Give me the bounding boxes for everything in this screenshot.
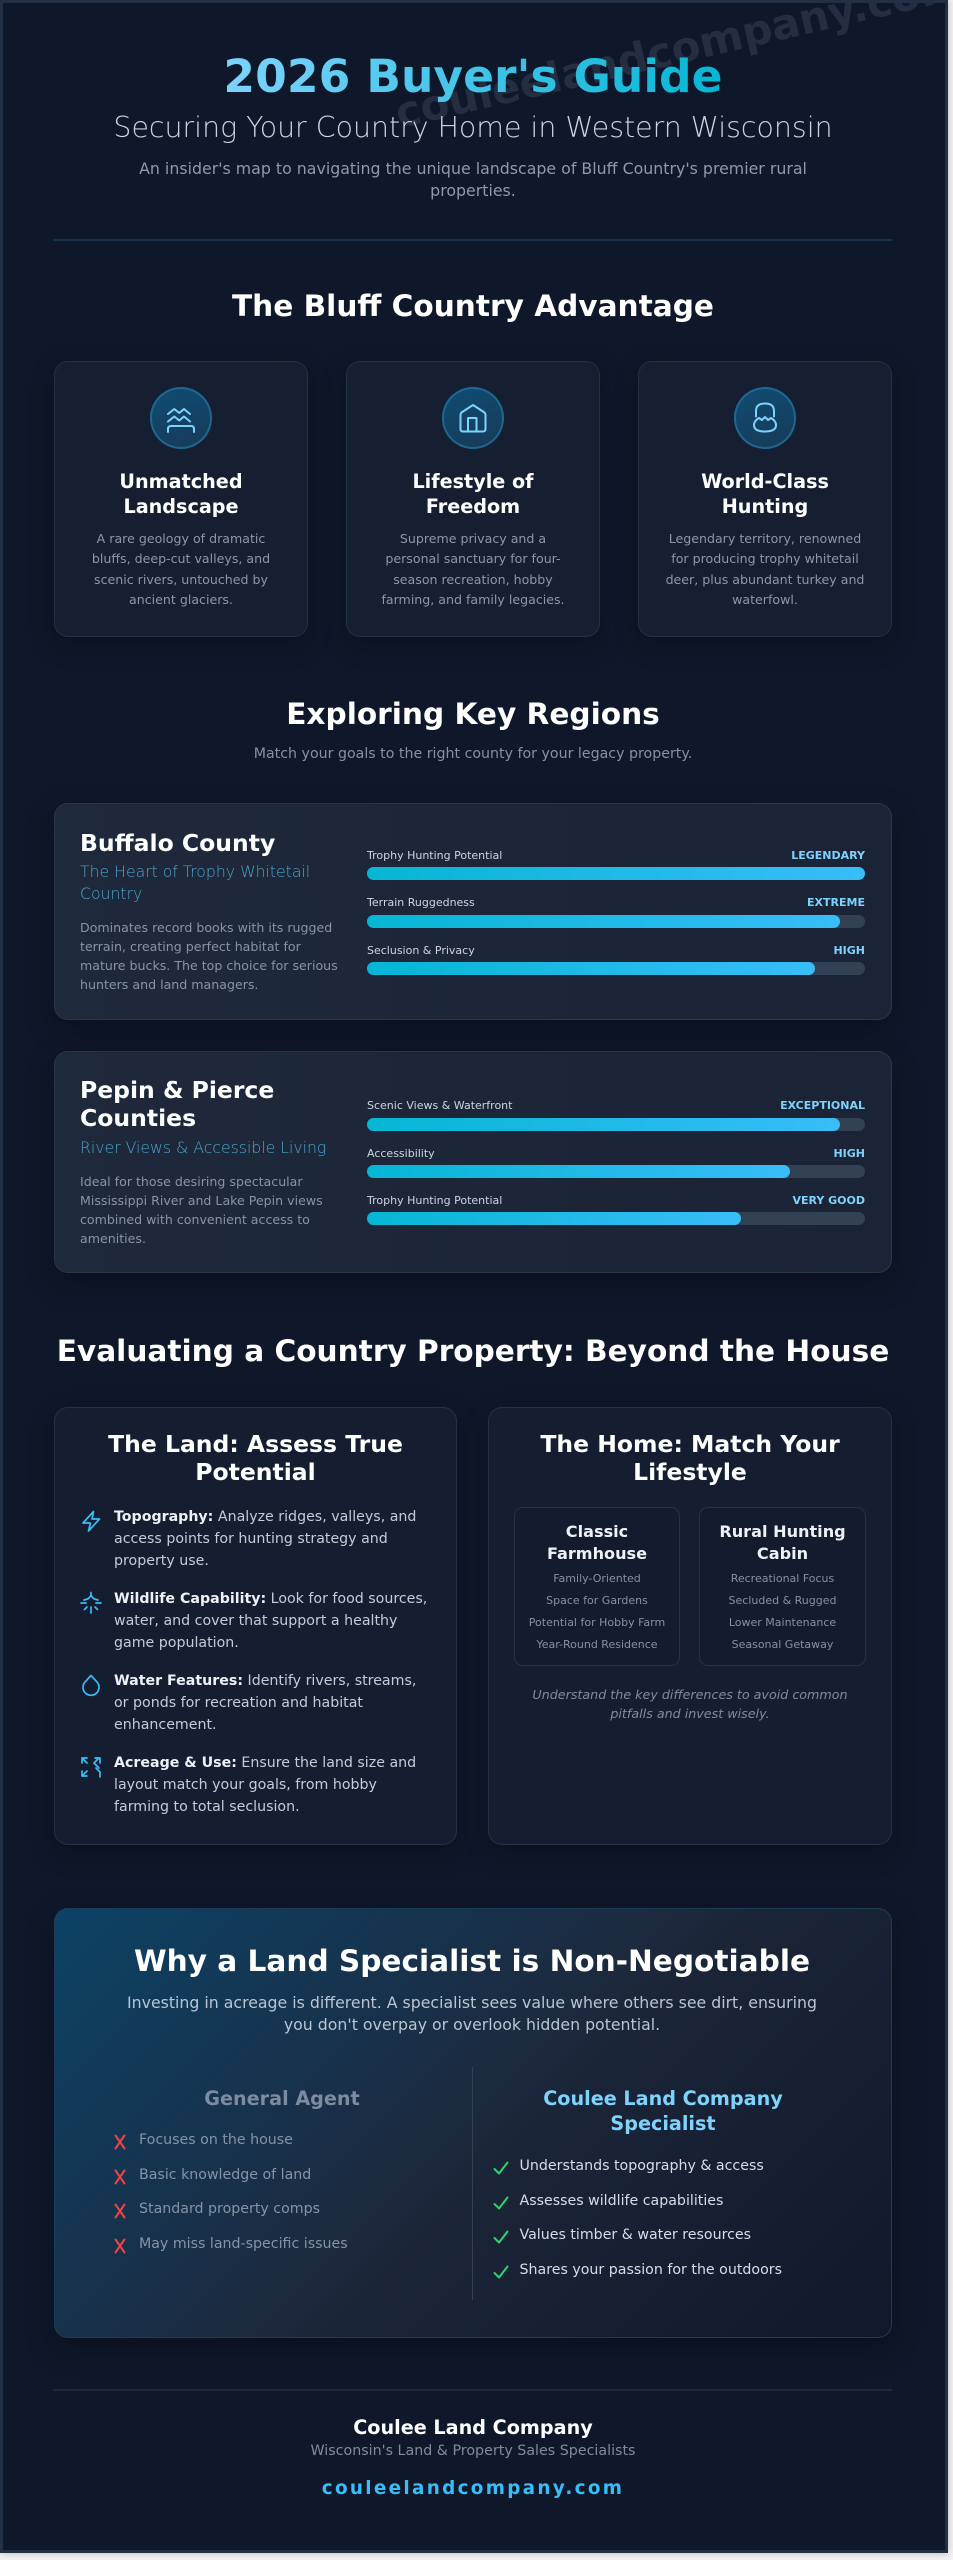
farmhouse traits: Family-Oriented: [553, 1572, 641, 1585]
card text: Supreme privacy and a: [400, 531, 546, 546]
icon: acreage: [81, 1757, 101, 1778]
bar: seclusion and privacy: [367, 944, 865, 975]
card text: A rare geology of dramatic: [97, 531, 265, 546]
subtitle: Securing Your Country Home in Western Wisconsin: [113, 111, 833, 144]
bar: scenic views: Scenic Views & Waterfront: [367, 1099, 512, 1112]
panel: the land: [54, 1407, 457, 1845]
text: water: Water Features: Identify rivers, streams,: [114, 1673, 416, 1689]
card text: [92, 531, 270, 607]
panel: the home: [488, 1407, 892, 1845]
bar: accessibility: [367, 1147, 865, 1178]
list item: [492, 2260, 852, 2280]
card heading: [412, 470, 534, 518]
footer company name: Coulee Land Company: [353, 2416, 593, 2439]
column heading: specialist: Coulee Land Company: [543, 2086, 783, 2110]
card text: ancient glaciers.: [129, 592, 233, 607]
text: acreage: farming to total seclusion.: [114, 1799, 300, 1815]
tagline: [139, 159, 807, 200]
region name: Buffalo County: [80, 829, 275, 857]
card text: bluffs, deep-cut valleys, and: [92, 551, 270, 566]
panel: Buffalo County: [54, 803, 892, 1020]
title: 2026 Buyer's Guide: [223, 50, 723, 103]
panel: unmatched landscape: [54, 361, 308, 637]
icon: topography: [82, 1510, 100, 1532]
bar: seclusion and privacy: HIGH: [833, 944, 865, 957]
subpanel heading: Rural Hunting: [719, 1522, 846, 1541]
icon: house: [442, 387, 504, 449]
bar: trophy hunting potential: LEGENDARY: [791, 849, 865, 862]
panel heading: [108, 1430, 403, 1486]
text: water: [114, 1673, 416, 1733]
region description: [80, 1174, 323, 1246]
card heading: Landscape: [123, 495, 239, 518]
panel: lifestyle of freedom: [346, 361, 600, 637]
region tagline: River Views & Accessible Living: [80, 1138, 326, 1157]
cabin traits: Recreational Focus: [731, 1572, 834, 1585]
heading: advantage: The Bluff Country Advantage: [232, 289, 714, 323]
text: topography: [114, 1509, 416, 1569]
cabin traits: Seasonal Getaway: [732, 1638, 833, 1651]
text: water: or ponds for recreation and habitat: [114, 1695, 363, 1711]
card text: personal sanctuary for four-: [385, 551, 561, 566]
region description: Ideal for those desiring spectacular: [80, 1174, 303, 1188]
list item: [492, 2225, 852, 2245]
text: water: enhancement.: [114, 1717, 217, 1733]
bar: trophy hunting potential: VERY GOOD: [792, 1194, 865, 1207]
farmhouse traits: Potential for Hobby Farm: [529, 1616, 665, 1629]
panel intro: Investing in acreage is different. A specialist sees value where others see dirt, ensuring: [127, 1992, 817, 2012]
card heading: Freedom: [426, 495, 520, 518]
card text: for producing trophy whitetail: [671, 551, 859, 566]
card heading: Unmatched: [119, 470, 243, 492]
text: topography: Topography: Analyze ridges, valleys, and: [114, 1509, 416, 1525]
panel intro: [127, 1992, 817, 2034]
column heading: specialist: [543, 2086, 783, 2134]
card heading: Hunting: [722, 495, 808, 518]
region name: [80, 1076, 274, 1132]
panel heading: The Home: Match Your: [540, 1430, 840, 1458]
icon: wildlife: [80, 1592, 102, 1614]
region tagline: Country: [80, 884, 142, 903]
region description: hunters and land managers.: [80, 976, 258, 992]
region name: Pepin & Pierce: [80, 1076, 274, 1104]
bar: trophy hunting potential: [366, 1194, 865, 1225]
cabin traits: Secluded & Rugged: [729, 1594, 836, 1607]
subpanel: cabin: [699, 1507, 866, 1666]
panel: world-class hunting: [638, 361, 892, 637]
bar: trophy hunting potential: Trophy Hunting Potential: [367, 849, 502, 862]
panel heading: Lifestyle: [633, 1458, 747, 1486]
card text: deer, plus abundant turkey and: [666, 572, 864, 587]
panel intro: you don't overpay or overlook hidden potential.: [284, 2015, 660, 2034]
bar: terrain ruggedness: [366, 896, 865, 928]
region tagline: The Heart of Trophy Whitetail: [80, 862, 310, 881]
card text: Legendary territory, renowned: [669, 531, 861, 546]
panel heading: Why a Land Specialist is Non-Negotiable: [134, 1944, 810, 1978]
region description: combined with convenient access to: [80, 1212, 310, 1226]
list item: [492, 2191, 852, 2211]
text: wildlife: [114, 1591, 427, 1651]
bar: accessibility: Accessibility: [367, 1147, 435, 1160]
text: wildlife: game population.: [114, 1635, 239, 1651]
card text: [666, 531, 864, 607]
subpanel: farmhouse: [514, 1507, 680, 1666]
bar: terrain ruggedness: EXTREME: [807, 896, 865, 909]
bar: accessibility: HIGH: [833, 1147, 865, 1160]
footer: [0, 2414, 946, 2504]
text: topography: property use.: [114, 1553, 209, 1569]
cabin traits: Lower Maintenance: [729, 1616, 836, 1629]
farmhouse traits: Space for Gardens: [546, 1594, 648, 1607]
text: wildlife: water, and cover that support a healthy: [114, 1613, 397, 1629]
heading: evaluating: Evaluating a Country Property: Beyond the House: [57, 1334, 889, 1368]
card text: [381, 531, 565, 607]
list item: Shares your passion for the outdoors: [520, 2262, 782, 2278]
panel heading: The Land: Assess True: [108, 1430, 403, 1458]
subpanel heading: Cabin: [757, 1544, 808, 1563]
panel: Pepin and Pierce Counties: [54, 1051, 892, 1273]
tagline: An insider's map to navigating the unique landscape of Bluff Country's premier rural: [139, 159, 807, 178]
panel heading: Potential: [195, 1458, 316, 1486]
note: Understand the key differences to avoid common: [532, 1687, 848, 1702]
list item: Basic knowledge of land: [139, 2167, 311, 2183]
list item: May miss land-specific issues: [139, 2236, 348, 2252]
icon: antlers: [734, 387, 796, 449]
panel: land specialist: [54, 1908, 892, 2338]
footer descriptor: Wisconsin's Land & Property Sales Specialists: [310, 2443, 635, 2459]
text: acreage: [114, 1755, 416, 1815]
card text: waterfowl.: [732, 592, 798, 607]
footer url: couleelandcompany.com: [322, 2478, 624, 2498]
card text: farming, and family legacies.: [381, 592, 565, 607]
icon: water drop: [82, 1674, 100, 1696]
bar: trophy hunting potential: Trophy Hunting Potential: [367, 1194, 502, 1207]
subpanel heading: [719, 1522, 846, 1563]
text: acreage: Acreage & Use: Ensure the land size and: [114, 1755, 416, 1771]
subpanel heading: [547, 1522, 647, 1563]
column heading: specialist: Specialist: [610, 2112, 716, 2134]
farmhouse traits: [529, 1572, 665, 1651]
region description: terrain, creating perfect habitat for: [80, 938, 301, 954]
card text: scenic rivers, untouched by: [94, 572, 268, 587]
card heading: World-Class: [701, 470, 829, 492]
tagline: properties.: [430, 181, 516, 200]
farmhouse traits: Year-Round Residence: [536, 1638, 658, 1651]
note: pitfalls and invest wisely.: [610, 1706, 770, 1721]
list item: Values timber & water resources: [520, 2227, 751, 2243]
bar: scenic views: EXCEPTIONAL: [780, 1099, 865, 1112]
list item: Assesses wildlife capabilities: [520, 2193, 723, 2209]
card text: season recreation, hobby: [393, 572, 553, 587]
text: wildlife: Wildlife Capability: Look for food sources,: [114, 1591, 427, 1607]
region description: [80, 920, 338, 992]
text: acreage: layout match your goals, from hobby: [114, 1777, 377, 1793]
panel heading: [540, 1430, 840, 1486]
note: [532, 1687, 848, 1721]
icon: mountains: [150, 387, 212, 449]
region description: Dominates record books with its rugged: [80, 920, 332, 934]
bar: seclusion and privacy: Seclusion & Privacy: [367, 944, 475, 957]
cabin traits: [729, 1572, 836, 1651]
heading: regions: Exploring Key Regions: [286, 697, 660, 731]
bar: scenic views: [367, 1099, 865, 1131]
regions subheading: Match your goals to the right county for your legacy property.: [254, 746, 692, 762]
card heading: Lifestyle of: [412, 470, 534, 492]
region description: Mississippi River and Lake Pepin views: [80, 1192, 323, 1208]
bar: terrain ruggedness: Terrain Ruggedness: [367, 896, 475, 909]
subpanel heading: Classic: [566, 1522, 628, 1541]
region description: amenities.: [80, 1230, 146, 1246]
bar: trophy hunting potential: [366, 849, 865, 880]
list item: Standard property comps: [139, 2201, 320, 2217]
card heading: [701, 470, 829, 518]
subpanel heading: Farmhouse: [547, 1544, 647, 1563]
text: topography: access points for hunting strategy and: [114, 1531, 388, 1547]
list item: Focuses on the house: [139, 2132, 293, 2148]
list item: Understands topography & access: [520, 2158, 764, 2174]
region name: Counties: [80, 1104, 196, 1132]
region description: mature bucks. The top choice for serious: [80, 958, 338, 972]
card heading: [119, 470, 243, 518]
region tagline: [80, 862, 310, 903]
column heading: general agent: General Agent: [204, 2086, 360, 2110]
